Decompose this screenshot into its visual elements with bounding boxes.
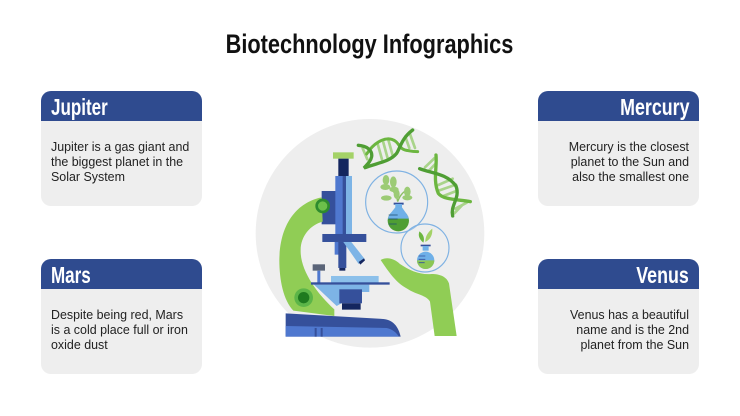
text: Venus description: name and is the 2nd xyxy=(576,323,689,337)
text: Mars description: Despite being red, Mars xyxy=(51,308,183,322)
heading: Venus: Venus xyxy=(636,262,689,288)
heading: Mercury: Mercury xyxy=(620,94,689,120)
icon: DNA helix right xyxy=(420,155,470,216)
text: Mercury description: planet to the Sun and xyxy=(571,155,689,169)
panel: Venus xyxy=(538,259,699,374)
panel: Jupiter xyxy=(41,91,202,206)
heading: Jupiter: Jupiter xyxy=(51,94,108,120)
heading: Mercury xyxy=(538,91,699,121)
text: Mars description: is a cold place full or iron xyxy=(51,323,188,337)
text: Venus description: planet from the Sun xyxy=(580,338,689,352)
heading: Mars xyxy=(41,259,202,289)
text: Mars description: oxide dust xyxy=(51,338,108,352)
heading: Jupiter xyxy=(41,91,202,121)
icon: large flask with plants xyxy=(366,171,428,233)
text: Mercury description: also the smallest one xyxy=(572,170,689,184)
text: Jupiter description xyxy=(51,140,189,184)
heading: Venus xyxy=(538,259,699,289)
title: Biotechnology Infographics xyxy=(226,29,514,59)
icon: microscope xyxy=(279,152,401,337)
text: Jupiter description: Solar System xyxy=(51,170,125,184)
background circle xyxy=(256,119,484,348)
icon: hand xyxy=(381,258,457,336)
text: Venus description xyxy=(570,308,689,352)
text: Jupiter description: the biggest planet in the xyxy=(51,155,183,169)
text: Mercury description xyxy=(569,140,689,184)
text: Venus description: Venus has a beautiful xyxy=(570,308,689,322)
panel: Mercury xyxy=(538,91,699,206)
text: Jupiter description: Jupiter is a gas giant and xyxy=(51,140,189,154)
text: Mercury description: Mercury is the closest xyxy=(569,140,689,154)
icon: DNA helix top xyxy=(358,130,418,168)
heading: Mars: Mars xyxy=(51,262,91,288)
text: Mars description xyxy=(51,308,188,352)
icon: small flask with sprout xyxy=(401,224,449,272)
panel: Mars xyxy=(41,259,202,374)
